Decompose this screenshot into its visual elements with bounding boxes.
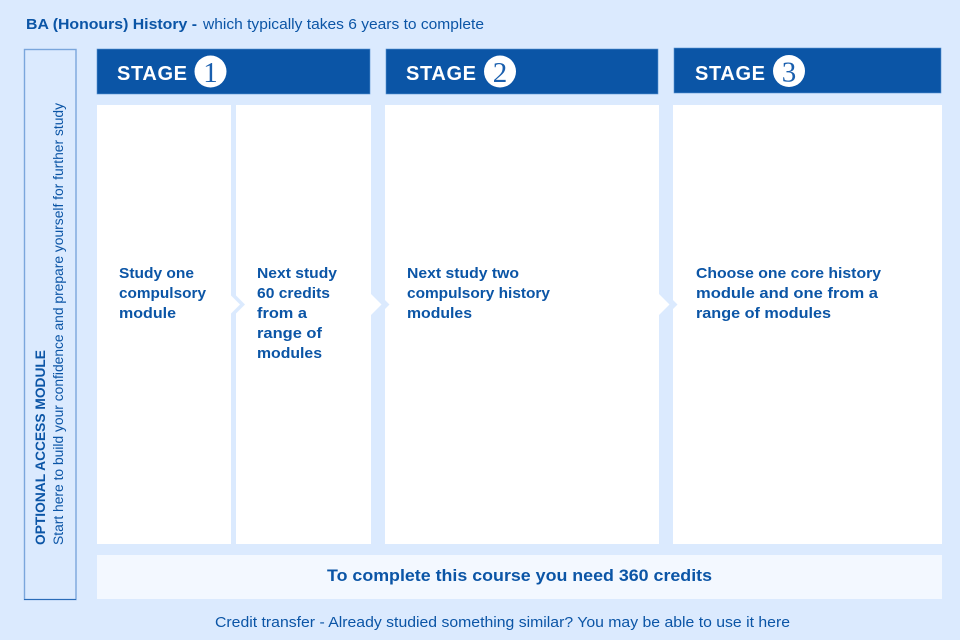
access module description: Start here to build your confidence and prepare yourself for further study <box>51 103 66 545</box>
panel: 60 credits: 60 credits <box>257 285 330 302</box>
panel: stage 2 header <box>386 49 658 94</box>
panel: optional access module <box>24 50 76 600</box>
panel: stage 2 modules: compulsory history <box>407 285 551 302</box>
panel: compulsory module <box>97 105 240 544</box>
panel: compulsory module: Study one <box>119 265 194 282</box>
panel: stage 2 modules: modules <box>407 305 472 322</box>
panel: stage 2 modules: Next study two <box>407 265 519 282</box>
panel: compulsory module: compulsory <box>119 285 207 302</box>
panel: 60 credits: from a <box>257 305 308 322</box>
icon: number 3 <box>773 55 805 88</box>
access module heading: OPTIONAL ACCESS MODULE <box>32 350 48 545</box>
icon: number 1: 1 <box>203 57 218 89</box>
panel: 60 credits <box>236 105 382 544</box>
panel: stage 3 header: STAGE <box>695 63 765 85</box>
panel: 60 credits: modules <box>257 345 322 362</box>
icon: number 3: 3 <box>782 56 796 88</box>
panel: 60 credits: range of <box>257 325 323 342</box>
panel: stage 2 modules <box>385 105 670 544</box>
icon: number 2: 2 <box>493 57 507 89</box>
panel: credits banner <box>97 555 942 599</box>
panel: stage 3 header <box>674 48 941 93</box>
panel: stage 3 modules: range of modules <box>696 305 831 322</box>
panel: stage 1 header <box>97 49 370 94</box>
panel: stage 3 modules: module and one from a <box>696 285 879 302</box>
panel: stage 1 header: STAGE <box>117 63 187 85</box>
panel: 60 credits: Next study <box>257 265 338 282</box>
title: which typically takes 6 years to complete <box>202 16 484 33</box>
panel: stage 2 header: STAGE <box>406 63 476 85</box>
credit transfer note: Credit transfer - Already studied something similar? You may be able to use it here <box>215 614 790 631</box>
icon: number 2 <box>484 56 516 89</box>
icon: number 1 <box>194 56 226 89</box>
title: BA (Honours) History - <box>26 16 197 33</box>
panel: stage 3 modules <box>673 105 942 544</box>
panel: stage 3 modules: Choose one core history <box>696 265 882 282</box>
panel: compulsory module: module <box>119 305 176 322</box>
panel: credits banner: To complete this course you need 360 credits <box>327 566 712 585</box>
title <box>26 16 484 33</box>
